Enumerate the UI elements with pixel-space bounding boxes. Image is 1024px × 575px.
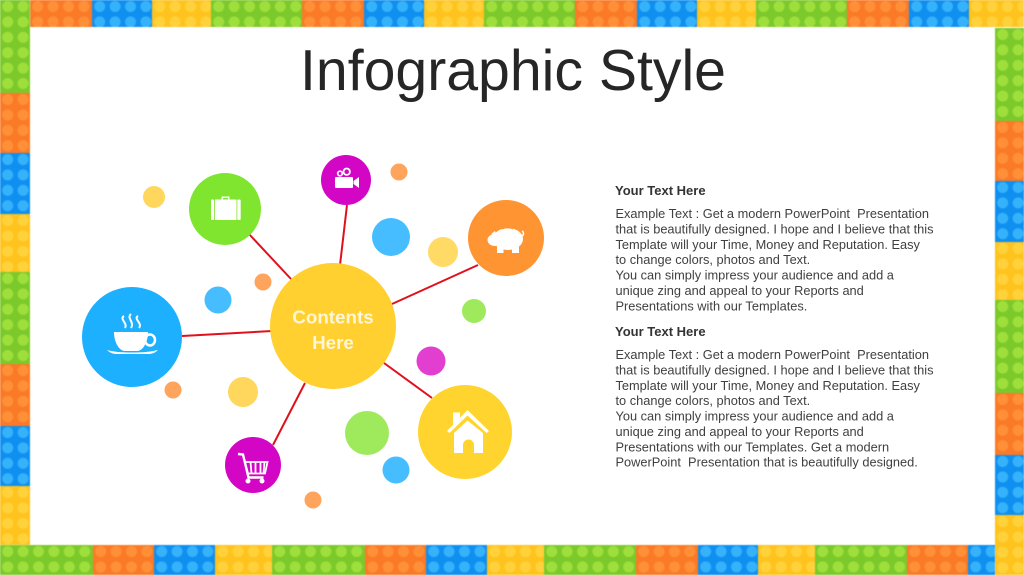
- node: house: [418, 385, 512, 479]
- text block 2: unique zing and appeal to your Reports and: [616, 424, 864, 439]
- node: video camera: [321, 155, 371, 205]
- node: piggy bank: [468, 200, 544, 276]
- text block 2: to change colors, photos and Text.: [616, 393, 810, 408]
- text block 2: Your Text Here: [615, 324, 706, 339]
- text block 1: that is beautifully designed. I hope and I believe that this: [616, 221, 934, 236]
- text block 2: Presentations with our Templates. Get a modern: [616, 439, 889, 454]
- text block 2: that is beautifully designed. I hope and I believe that this: [616, 362, 934, 377]
- node: coffee cup: [82, 287, 182, 387]
- central circle: contents here: [270, 263, 396, 389]
- text block 1: Your Text Here: [615, 183, 706, 198]
- text block 1: unique zing and appeal to your Reports and: [616, 283, 864, 298]
- border: bottom bricks: [0, 545, 995, 575]
- decorative dots: [143, 164, 486, 508]
- text block 2: You can simply impress your audience and add a: [616, 408, 895, 424]
- text block 2: [615, 324, 934, 470]
- connector lines: [182, 205, 478, 445]
- title: Infographic Style: [300, 39, 726, 103]
- border: left bricks: [0, 0, 30, 545]
- text block 1: Presentations with our Templates.: [616, 298, 807, 313]
- border: top bricks: [30, 0, 1024, 27]
- text block 1: You can simply impress your audience and add a: [616, 268, 895, 282]
- text block 1: [615, 183, 934, 313]
- node: briefcase: [189, 173, 261, 245]
- border: right bricks: [995, 28, 1024, 575]
- text block 1: Template will your Time, Money and Reputation. Easy: [616, 237, 921, 252]
- text block 1: Example Text : Get a modern PowerPoint Presentation: [616, 206, 929, 221]
- text block 2: PowerPoint Presentation that is beautifully designed.: [616, 455, 918, 470]
- text block 2: Example Text : Get a modern PowerPoint Presentation: [616, 347, 929, 362]
- central circle: contents here: Contents: [292, 306, 374, 328]
- text block 1: to change colors, photos and Text.: [616, 252, 810, 267]
- node: shopping cart: [225, 437, 281, 493]
- central circle: contents here: Here: [312, 332, 354, 353]
- text block 2: Template will your Time, Money and Reputation. Easy: [616, 378, 921, 393]
